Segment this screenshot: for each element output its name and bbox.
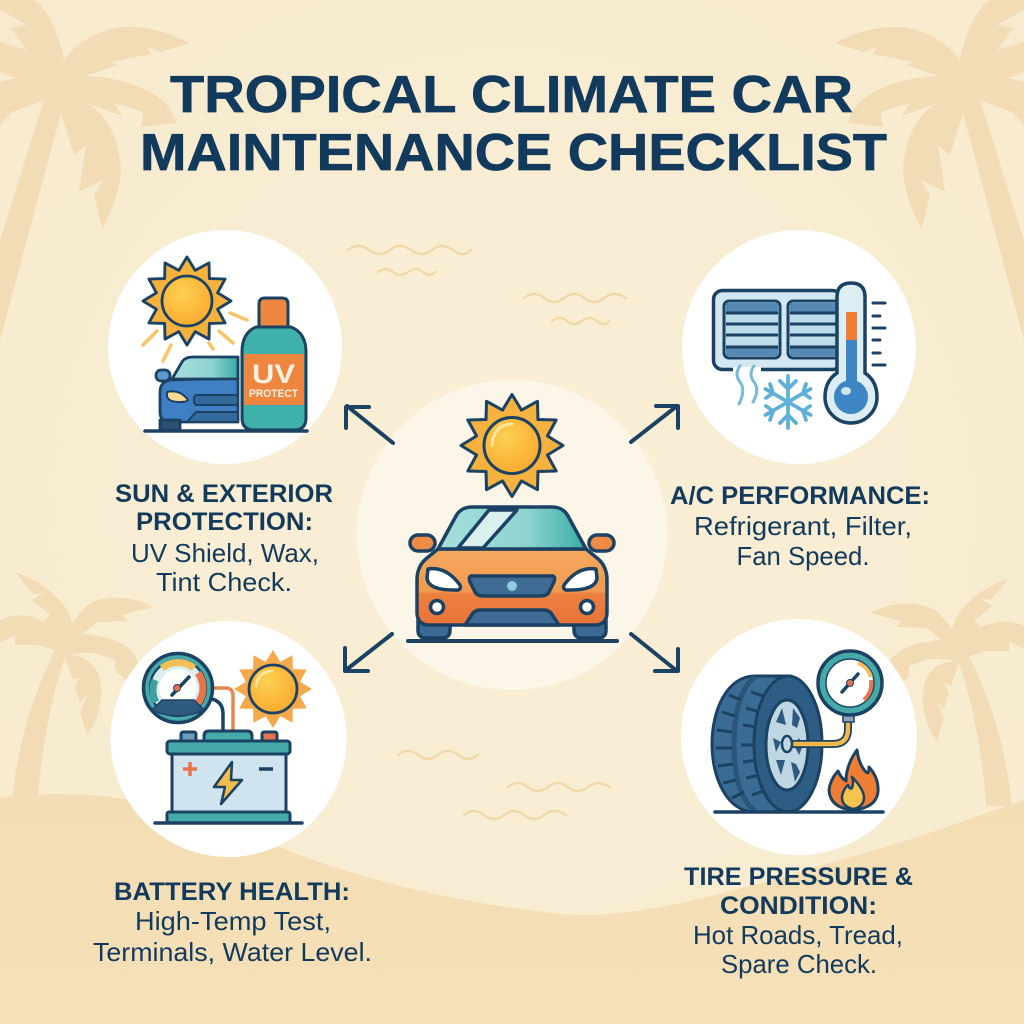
text: tire pressure: TIRE PRESSURE & — [684, 863, 913, 891]
text: A/C performance: A/C PERFORMANCE: — [670, 482, 930, 510]
title — [140, 66, 887, 182]
decorative waves — [348, 246, 626, 819]
icon: UV protect bottle — [242, 298, 306, 430]
icon: gauge — [818, 651, 882, 715]
panel: center car — [357, 380, 667, 690]
panel: tire pressure — [681, 619, 917, 855]
text: battery health — [93, 878, 372, 967]
icon: flame — [829, 750, 878, 810]
text: battery health: Terminals, Water Level. — [93, 937, 372, 967]
text: A/C performance: Refrigerant, Filter, — [694, 511, 912, 541]
icon: sun — [461, 394, 563, 496]
panel: A/C performance — [682, 230, 916, 464]
text: sun and exterior protection: Tint Check. — [156, 567, 292, 597]
icon: air vent — [714, 290, 844, 370]
icon: gauge — [144, 654, 212, 722]
sun rays — [143, 313, 247, 361]
cables — [212, 688, 233, 731]
icon: battery — [167, 731, 290, 823]
icon: blue car — [156, 357, 238, 430]
cable: gauge to battery — [212, 699, 223, 731]
text: A/C performance: Fan Speed. — [736, 541, 870, 571]
icon: UV protect bottle: UV — [252, 359, 295, 389]
palm tree: top left — [0, 0, 189, 340]
icon: sun disc — [249, 665, 297, 713]
text: sun and exterior protection — [115, 480, 333, 597]
icon: sun — [234, 650, 312, 728]
text: sun and exterior protection: UV Shield, Wax, — [131, 538, 319, 568]
text: battery health: BATTERY HEALTH: — [114, 878, 350, 906]
text: tire pressure: Hot Roads, Tread, — [693, 920, 903, 950]
text: tire pressure — [684, 863, 913, 979]
icon: cold air lines — [737, 366, 757, 404]
icon: tire — [712, 676, 822, 812]
text: battery health: High-Temp Test, — [135, 906, 331, 936]
icon: snowflake — [766, 376, 810, 428]
icon: sun — [143, 257, 231, 345]
title: TROPICAL CLIMATE CAR — [170, 66, 853, 124]
icon: thermometer — [825, 283, 885, 423]
palm tree: lower left — [0, 572, 153, 800]
text: tire pressure: Spare Check. — [721, 949, 877, 979]
panel: battery health — [110, 621, 346, 857]
text: A/C performance — [670, 482, 930, 571]
text: tire pressure: CONDITION: — [720, 892, 877, 920]
palm tree: lower right — [871, 578, 1024, 806]
arrows from center — [345, 406, 678, 671]
icon: orange car — [410, 507, 614, 638]
panel: sun and exterior protection — [108, 230, 342, 464]
palm tree: top right — [835, 0, 1024, 340]
vent gap — [733, 367, 761, 372]
text: sun and exterior protection: SUN & EXTERIOR — [115, 480, 333, 508]
title: MAINTENANCE CHECKLIST — [140, 124, 887, 182]
sand dune — [0, 794, 1024, 1024]
icon: gauge hose — [782, 715, 854, 752]
text: sun and exterior protection: PROTECTION: — [136, 508, 313, 536]
icon: UV protect bottle: PROTECT — [249, 388, 298, 400]
